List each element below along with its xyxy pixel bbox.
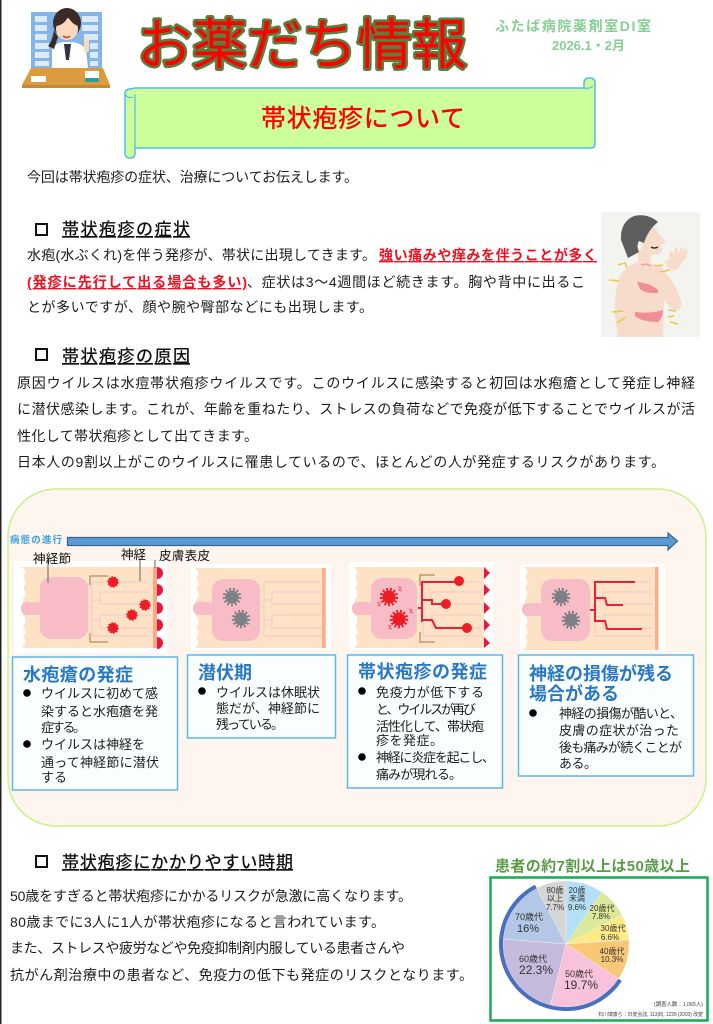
pie chart xyxy=(503,881,629,1007)
text box: stage 4: 皮膚の症状が治った xyxy=(559,723,679,738)
issuer and date: ふたば病院薬剤室DI室 xyxy=(495,18,651,34)
text box: stage 3: と、ウイルスが再び xyxy=(376,702,476,717)
section: causes heading: 帯状疱疹の原因 xyxy=(62,347,190,366)
pie labels: 20歳 xyxy=(569,885,585,895)
text box: stage 3: 免疫力が低下する xyxy=(376,685,484,700)
pie labels: 10.3% xyxy=(601,955,623,964)
text box: stage 3: 活性化して、帯状疱 xyxy=(376,719,484,734)
pie labels: 16% xyxy=(517,923,539,935)
text box: stage 2: ウイルスは休眠状 xyxy=(216,685,320,700)
pie labels: 20歳代 xyxy=(590,903,614,913)
symptoms text: 、症状は3～4週間ほど続きます。胸や背中に出るこ xyxy=(247,274,585,290)
panel: disease progression xyxy=(8,489,706,826)
pie labels: 7.7% xyxy=(546,903,564,912)
pie labels: 60歳代 xyxy=(519,953,547,964)
banner heading: 帯状疱疹について xyxy=(261,105,465,133)
section: at-risk period heading: 帯状疱疹にかかりやすい時期 xyxy=(62,853,293,872)
issuer and date xyxy=(495,18,651,53)
text box: stage 1: する xyxy=(41,770,67,785)
scroll banner xyxy=(125,78,595,158)
diagram: stage 2 xyxy=(191,564,331,650)
text box: stage 2 xyxy=(188,655,336,738)
panel: age pie chart xyxy=(490,878,708,1020)
text box: stage 4: 後も痛みが続くことが xyxy=(559,740,682,755)
pie labels: 19.7% xyxy=(564,978,598,992)
pie labels: 40歳代 xyxy=(600,946,624,956)
icon: man with shingles rash xyxy=(601,212,700,337)
text box: stage 4: 場合がある xyxy=(529,683,619,704)
pie labels: 未満 xyxy=(569,893,585,903)
text box: stage 4: 神経の損傷が残る xyxy=(529,663,673,684)
pie labels: 30歳代 xyxy=(601,923,625,933)
text box: stage 1: ウイルスに初めて感 xyxy=(41,686,158,701)
text box: stage 4: ある。 xyxy=(559,756,597,771)
text box: stage 3 xyxy=(348,655,502,788)
at-risk period text xyxy=(10,888,473,983)
causes text: 日本人の9割以上がこのウイルスに罹患しているので、ほとんどの人が発症するリスクがあります。 xyxy=(17,454,665,470)
diagram labels: 神経節 xyxy=(33,551,71,566)
pie labels: 以上 xyxy=(547,894,563,903)
text box: stage 1: 症する。 xyxy=(41,720,86,735)
diagram labels: 神経 xyxy=(121,547,146,562)
causes text: 性化して帯状疱疹として出てきます。 xyxy=(17,428,258,444)
arc: age 50 and over xyxy=(501,886,620,1009)
text box: stage 3: 帯状疱疹の発症 xyxy=(358,662,487,682)
diagram labels xyxy=(33,547,210,566)
text box: stage 1: 通って神経節に潜伏 xyxy=(41,755,159,770)
symptoms text: とが多いですが、顔や腕や臀部などにも出現します。 xyxy=(27,299,373,315)
chart source: (調査人数：1,065人) xyxy=(654,1000,703,1008)
pie labels: 70歳代 xyxy=(515,911,543,922)
text box: stage 4: 神経の損傷が酷いと、 xyxy=(559,706,683,721)
at-risk period text: 50歳をすぎると帯状疱疹にかかるリスクが急激に高くなります。 xyxy=(10,888,412,904)
symptoms text: 水疱(水ぶくれ)を伴う発疹が、帯状に出現してきます。 xyxy=(27,247,376,263)
text box: stage 1: ウイルスは神経を xyxy=(41,737,145,752)
at-risk period text: また、ストレスや疲労などや免疫抑制剤内服している患者さんや xyxy=(10,940,405,956)
causes text: に潜伏感染します。これが、年齢を重ねたり、ストレスの負荷などで免疫が低下することでウイルスが活 xyxy=(17,401,695,417)
pie labels: 7.8% xyxy=(592,912,610,921)
pie labels: 80歳 xyxy=(547,885,563,895)
pie labels: 50歳代 xyxy=(565,968,593,979)
chart heading: 患者の約7割以上は50歳以上 xyxy=(495,857,690,875)
diagram: stage 3 xyxy=(349,562,493,650)
symptoms text xyxy=(27,247,597,315)
text box: stage 1: 染すると水疱瘡を発 xyxy=(41,704,158,719)
intro text: 今回は帯状疱疹の症状、治療についてお伝えします。 xyxy=(27,169,358,185)
causes text xyxy=(17,375,695,470)
at-risk period text: 抗がん剤治療中の患者など、免疫力の低下も発症のリスクとなります。 xyxy=(10,967,473,983)
text box: stage 2: 潜伏期 xyxy=(198,662,252,683)
pie labels: 6.6% xyxy=(601,933,619,942)
section: symptoms heading: 帯状疱疹の症状 xyxy=(62,220,190,239)
diagram: stage 4 xyxy=(520,564,665,651)
title: お薬だち情報 xyxy=(137,14,467,76)
text box: stage 2: 態だが、神経節に xyxy=(216,701,320,716)
diagram: stage 1 xyxy=(14,547,210,653)
diagram labels: 皮膚表皮 xyxy=(159,548,210,563)
causes text: 原因ウイルスは水痘帯状疱疹ウイルスです。このウイルスに感染すると初回は水疱瘡として発症し神経 xyxy=(17,375,695,391)
text box: stage 3: 神経に炎症を起こし、 xyxy=(376,750,495,765)
pie labels: 9.6% xyxy=(568,903,586,912)
at-risk period text: 80歳までに3人に1人が帯状疱疹になると言われています。 xyxy=(10,914,385,930)
text box: stage 2: 残っている。 xyxy=(216,717,284,732)
symptoms text: (発疹に先行して出る場合も多い) xyxy=(27,274,247,290)
arrow: progression xyxy=(68,533,678,550)
text box: stage 1: 水疱瘡の発症 xyxy=(23,665,133,685)
symptoms text: 強い痛みや痒みを伴うことが多く xyxy=(379,247,597,263)
icon: pharmacist at counter xyxy=(22,8,110,88)
pie labels: 22.3% xyxy=(519,963,553,977)
issuer and date: 2026.1・2月 xyxy=(552,38,625,53)
chart source: 石川博康ら：日皮会誌, 113(8), 1229 (2003) 改変 xyxy=(598,1011,703,1018)
chart source xyxy=(598,1000,703,1018)
text box: stage 3: 痛みが現れる。 xyxy=(376,767,462,782)
text box: stage 3: 疹を発症。 xyxy=(376,733,443,748)
text box: stage 1 xyxy=(12,657,178,790)
pie labels xyxy=(515,885,625,992)
text box: stage 4 xyxy=(518,655,694,776)
progression label: 病態の進行 xyxy=(10,534,62,546)
